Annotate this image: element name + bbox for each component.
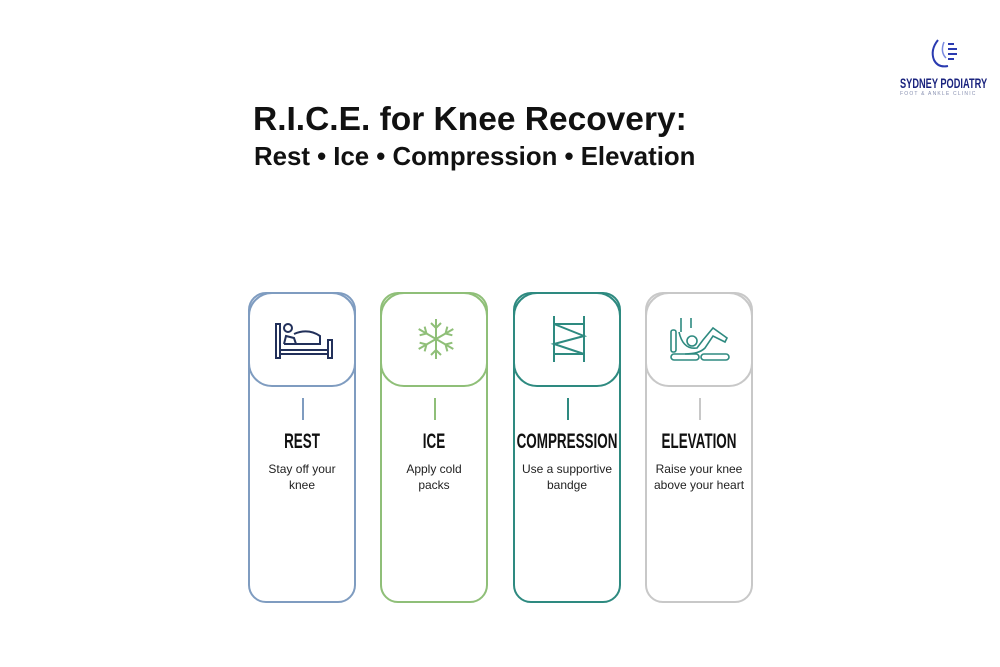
description: knee	[289, 478, 315, 492]
label: ICE	[423, 430, 445, 453]
description	[522, 462, 612, 492]
description: bandge	[547, 478, 587, 492]
icon: snowflake	[380, 292, 488, 387]
icon: raised leg	[645, 292, 753, 387]
logo: SYDNEY PODIATRY	[900, 75, 987, 91]
description	[654, 462, 744, 492]
panel: elevation	[645, 292, 753, 603]
panel: ice	[380, 292, 488, 603]
subtitle: Rest • Ice • Compression • Elevation	[254, 143, 695, 171]
description: Raise your knee	[656, 462, 742, 476]
description: Apply cold	[406, 462, 462, 476]
panel: rest	[248, 292, 356, 603]
logo	[900, 39, 987, 97]
panel: compression	[513, 292, 621, 603]
label: REST	[284, 430, 320, 453]
description: Use a supportive	[522, 462, 612, 476]
description	[406, 462, 462, 492]
title: R.I.C.E. for Knee Recovery:	[253, 101, 687, 138]
description: Stay off your	[268, 462, 336, 476]
label: ELEVATION	[662, 430, 736, 453]
logo: FOOT & ANKLE CLINIC	[900, 91, 977, 97]
icon: bandage	[513, 292, 621, 387]
icon: bed	[248, 292, 356, 387]
label: COMPRESSION	[517, 430, 617, 453]
description: above your heart	[654, 478, 744, 492]
description: packs	[418, 478, 450, 492]
description	[268, 462, 336, 492]
